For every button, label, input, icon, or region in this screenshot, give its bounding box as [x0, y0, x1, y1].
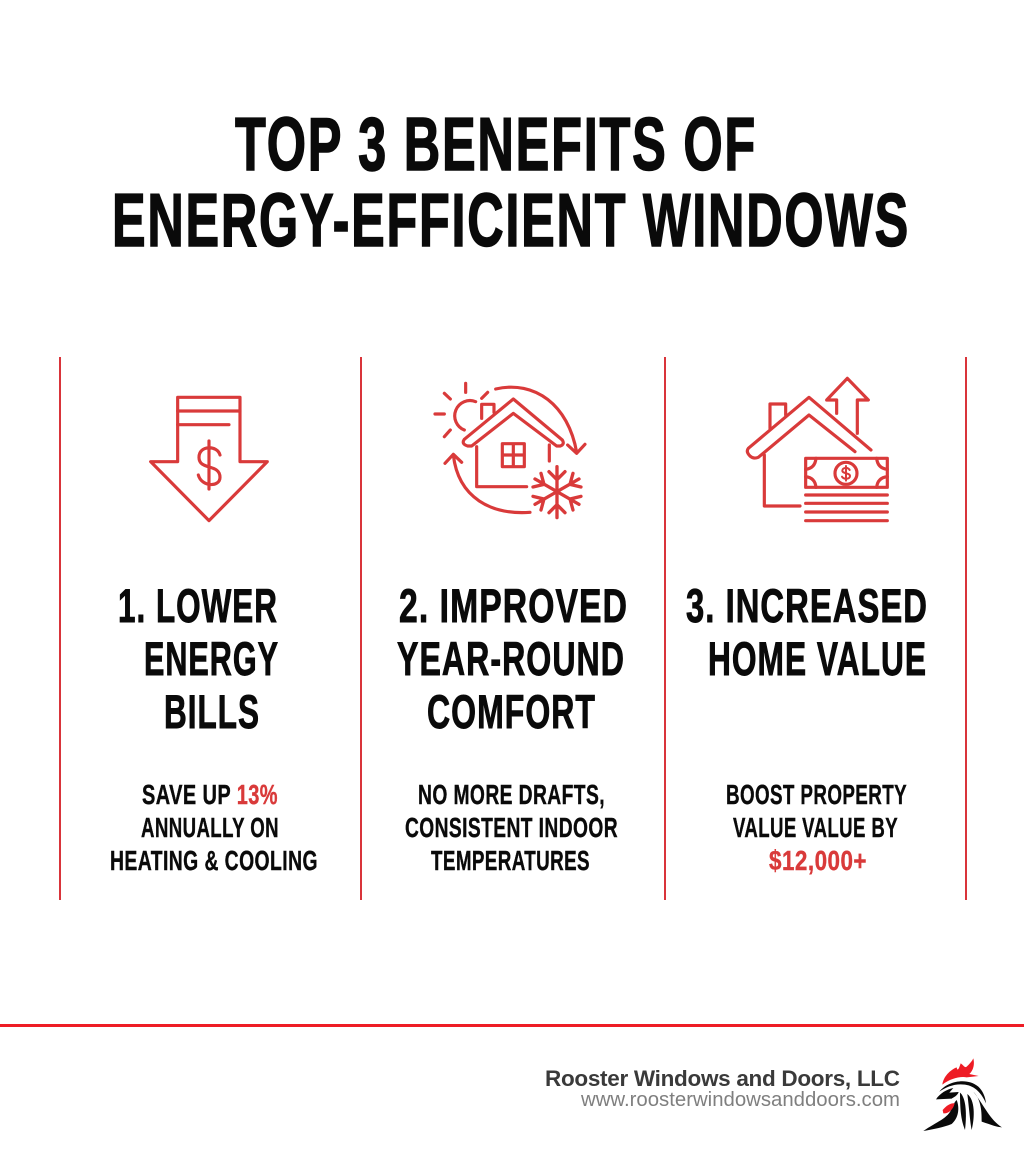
panel: year-round comfort — [397, 383, 628, 876]
text: comfort detail — [405, 779, 618, 876]
title — [112, 102, 910, 262]
text: savings detail: ANNUALLY ON — [141, 812, 279, 843]
heading: increased home value: HOME VALUE — [708, 632, 927, 685]
heading: improved year-round comfort: COMFORT — [427, 685, 596, 738]
panel: increased home value — [686, 378, 928, 876]
text: savings detail — [110, 779, 318, 876]
heading: increased home value: 3. INCREASED — [686, 579, 928, 632]
heading: lower energy bills: 1. LOWER — [118, 579, 278, 632]
title: TOP 3 BENEFITS OF — [235, 102, 757, 186]
text: comfort detail: CONSISTENT INDOOR — [405, 812, 618, 843]
icon: house with up arrow and money stack — [747, 378, 887, 521]
heading: lower energy bills: BILLS — [164, 685, 260, 738]
icon: rooster logo — [923, 1058, 1002, 1131]
heading: increased home value — [686, 579, 928, 685]
text: value detail: $12,000+ — [769, 845, 867, 876]
heading: lower energy bills: ENERGY — [144, 632, 279, 685]
panel: lower energy bills — [110, 397, 318, 876]
heading: improved year-round comfort: 2. IMPROVED — [399, 579, 628, 632]
text: value detail: VALUE VALUE BY — [733, 812, 898, 843]
text: value detail: BOOST PROPERTY — [726, 779, 907, 810]
icon: house with sun, snowflake and cycle arrows — [435, 383, 585, 518]
text: comfort detail: NO MORE DRAFTS, — [418, 779, 605, 810]
text: savings detail: SAVE UP 13% — [142, 779, 278, 810]
heading: improved year-round comfort: YEAR-ROUND — [397, 632, 625, 685]
text: comfort detail: TEMPERATURES — [431, 845, 590, 876]
heading: improved year-round comfort — [397, 579, 628, 738]
text: savings detail: HEATING & COOLING — [110, 845, 318, 876]
icon: down arrow with bill and dollar — [151, 397, 267, 521]
footer: company name and website: www.roosterwindowsanddoors.com — [580, 1089, 900, 1111]
footer: company name and website: Rooster Windows and Doors, LLC — [545, 1066, 900, 1091]
text: value detail — [726, 779, 907, 876]
footer: company name and website — [545, 1066, 900, 1111]
heading: lower energy bills — [118, 579, 279, 738]
